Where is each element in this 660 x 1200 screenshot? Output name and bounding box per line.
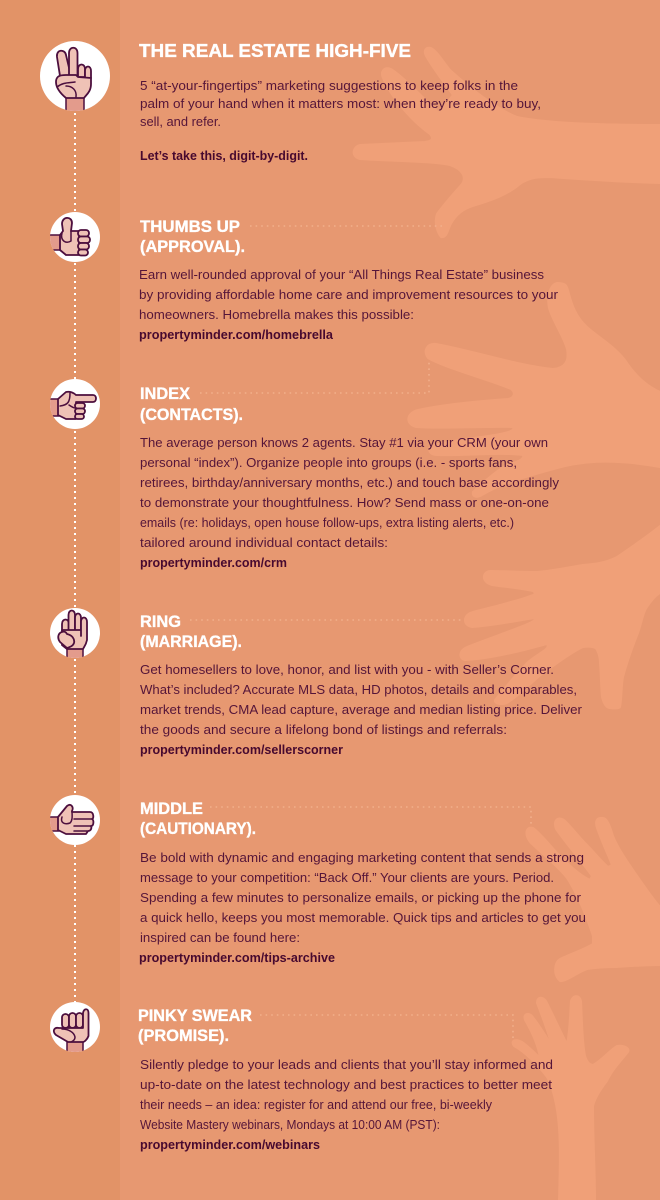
heading: (CAUTIONARY). [140,819,256,838]
body text: retirees, birthday/anniversary months, etc.) and touch base accordingly [140,475,560,490]
heading [140,612,242,651]
icon: middle hand [48,795,100,845]
background hand 5 [513,996,628,1200]
left timeline strip [0,0,120,1200]
body text: to demonstrate your thoughtfulness. How? Send mass or one-on-one [140,495,549,510]
heading: (APPROVAL). [140,237,245,256]
body text: Earn well-rounded approval of your “All Things Real Estate” business [139,267,545,282]
heading [140,217,245,256]
intro paragraph: 5 “at-your-fingertips” marketing suggestions to keep folks in the [140,78,518,93]
body text: emails (re: holidays, open house follow-ups, extra listing alerts, etc.) [140,515,514,530]
background hand 4 [526,818,660,981]
heading [138,1006,252,1045]
intro paragraph: sell, and refer. [140,114,221,129]
body text: the goods and secure a lifelong bond of listings and referrals: [140,722,507,737]
body text: tailored around individual contact details: [140,535,388,550]
icon: thumbs up [48,212,100,262]
heading: RING [140,612,181,631]
heading: PINKY SWEAR [138,1006,252,1025]
heading: THUMBS UP [140,217,240,236]
background hand 1 [354,48,660,237]
heading: (PROMISE). [138,1026,229,1045]
body text [140,435,560,570]
body text: personal “index”). Organize people into groups (i.e. - sports fans, [140,455,517,470]
section: thumbs up [139,217,559,342]
heading: INDEX [140,384,191,403]
section: pinky [138,1006,553,1152]
body text: The average person knows 2 agents. Stay #1 via your CRM (your own [140,435,548,450]
background hand 2 [408,283,660,497]
intro paragraph: palm of your hand when it matters most: when they’re ready to buy, [140,96,541,111]
body text: homeowners. Homebrella makes this possible: [139,307,414,322]
heading: (CONTACTS). [140,405,243,424]
intro paragraph [140,78,541,129]
heading: MIDDLE [140,799,203,818]
heading [140,799,256,838]
body text: propertyminder.com/sellerscorner [140,743,343,757]
tagline: Let’s take this, digit-by-digit. [140,149,308,163]
icon: peace hand [40,41,110,112]
icon: pointing index [48,379,100,429]
body text: a quick hello, keeps you most memorable. Quick tips and articles to get you [140,910,586,925]
body text: propertyminder.com/webinars [140,1138,320,1152]
heading [140,384,243,424]
body text: Website Mastery webinars, Mondays at 10:00 AM (PST): [140,1117,440,1132]
heading: (MARRIAGE). [140,632,242,651]
section: index [140,360,560,570]
body text: Spending a few minutes to personalize emails, or picking up the phone for [140,890,582,905]
body text [140,662,583,757]
body text: inspired can be found here: [140,930,300,945]
icon: ring hand [50,608,100,660]
section: ring [140,612,583,757]
timeline dotted line [74,113,76,1002]
body text: Get homesellers to love, honor, and list with you - with Seller’s Corner. [140,662,554,677]
title: THE REAL ESTATE HIGH-FIVE [139,41,411,61]
body text [139,850,586,965]
body text: Be bold with dynamic and engaging marketing content that sends a strong [140,850,584,865]
body text: their needs – an idea: register for and attend our free, bi-weekly [140,1097,492,1112]
body text: propertyminder.com/crm [140,556,287,570]
body text: propertyminder.com/tips-archive [139,951,335,965]
body text: message to your competition: “Back Off.” Your clients are yours. Period. [140,870,554,885]
body text: propertyminder.com/homebrella [139,328,334,342]
body text: What’s included? Accurate MLS data, HD photos, details and comparables, [140,682,577,697]
body text: up-to-date on the latest technology and best practices to better meet [140,1077,552,1092]
body text [140,1057,553,1152]
icon: pinky hand [50,1002,100,1054]
section: middle [139,799,586,965]
body text: Silently pledge to your leads and clients that you’ll stay informed and [140,1057,553,1072]
body text [139,267,559,342]
body text: by providing affordable home care and improvement resources to your [139,287,559,302]
background hand 3 [460,526,660,708]
body text: market trends, CMA lead capture, average and median listing price. Deliver [140,702,583,717]
section: intro [139,41,541,163]
